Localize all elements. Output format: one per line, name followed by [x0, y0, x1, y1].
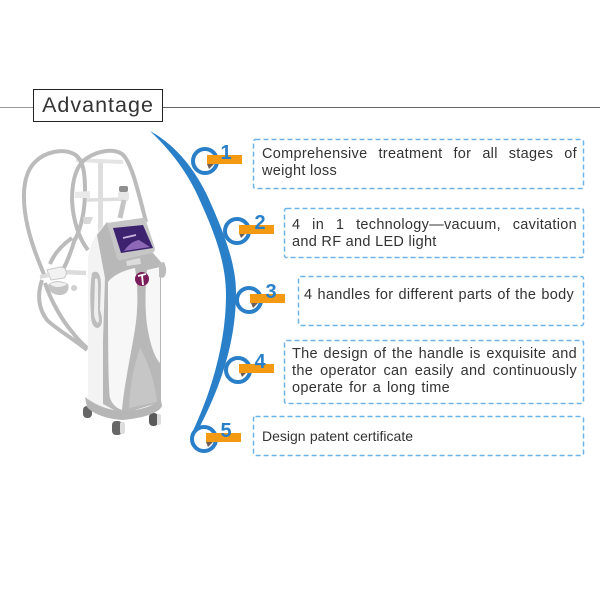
- tower body: [88, 222, 166, 414]
- text: advantage 3: 4 handles for different parts of the body: [304, 287, 574, 303]
- title: Advantage: [42, 93, 154, 117]
- left handpiece: [75, 191, 93, 224]
- panel: advantage 1: [254, 140, 584, 188]
- marker 5 number: 5: [220, 420, 232, 442]
- marker 2 number: 2: [254, 212, 266, 234]
- wheels: [83, 406, 161, 435]
- text: advantage 1 line 1: Comprehensive treatment for all stages of: [262, 146, 577, 162]
- blue arc: [150, 131, 236, 437]
- text: advantage 4 line 2: the operator can easily and continuously: [292, 363, 577, 379]
- marker 2 tag: [239, 225, 274, 234]
- text: advantage 1 line 2: weight loss: [262, 163, 337, 179]
- text: advantage 4 line 3: operate for a long time: [292, 380, 450, 396]
- marker 4 tag: [239, 364, 274, 373]
- marker 3 tag: [250, 294, 285, 303]
- panel: advantage 4: [284, 340, 584, 404]
- logo badge: [135, 272, 149, 286]
- ring 4: [226, 358, 250, 382]
- touch screen: [107, 218, 155, 266]
- text: advantage 5: Design patent certificate: [262, 428, 413, 444]
- marker 4 number: 4: [254, 351, 266, 373]
- marker 1 number: 1: [220, 142, 232, 164]
- panel: advantage 5: [254, 416, 584, 456]
- text: advantage 4 line 1: The design of the handle is exquisite and: [292, 346, 577, 362]
- panel: advantage 3: [298, 276, 584, 326]
- text: advantage 2 line 2: and RF and LED light: [292, 234, 437, 250]
- panel: advantage 2: [284, 208, 584, 258]
- ring 5: [192, 427, 216, 451]
- ring 2: [225, 219, 249, 243]
- marker 5 tag: [206, 433, 241, 442]
- title: [33, 89, 163, 122]
- lower handle: [40, 267, 77, 295]
- marker 1 tag: [207, 155, 242, 164]
- marker 3 number: 3: [265, 281, 277, 303]
- right handpiece: [118, 186, 129, 218]
- ring 1: [193, 149, 217, 173]
- ring 3: [237, 288, 261, 312]
- pole and crossbars: [63, 160, 128, 273]
- tower base: [85, 397, 162, 420]
- hoses: [24, 151, 146, 350]
- text: advantage 2 line 1: 4 in 1 technology—vacuum, cavitation: [292, 217, 577, 233]
